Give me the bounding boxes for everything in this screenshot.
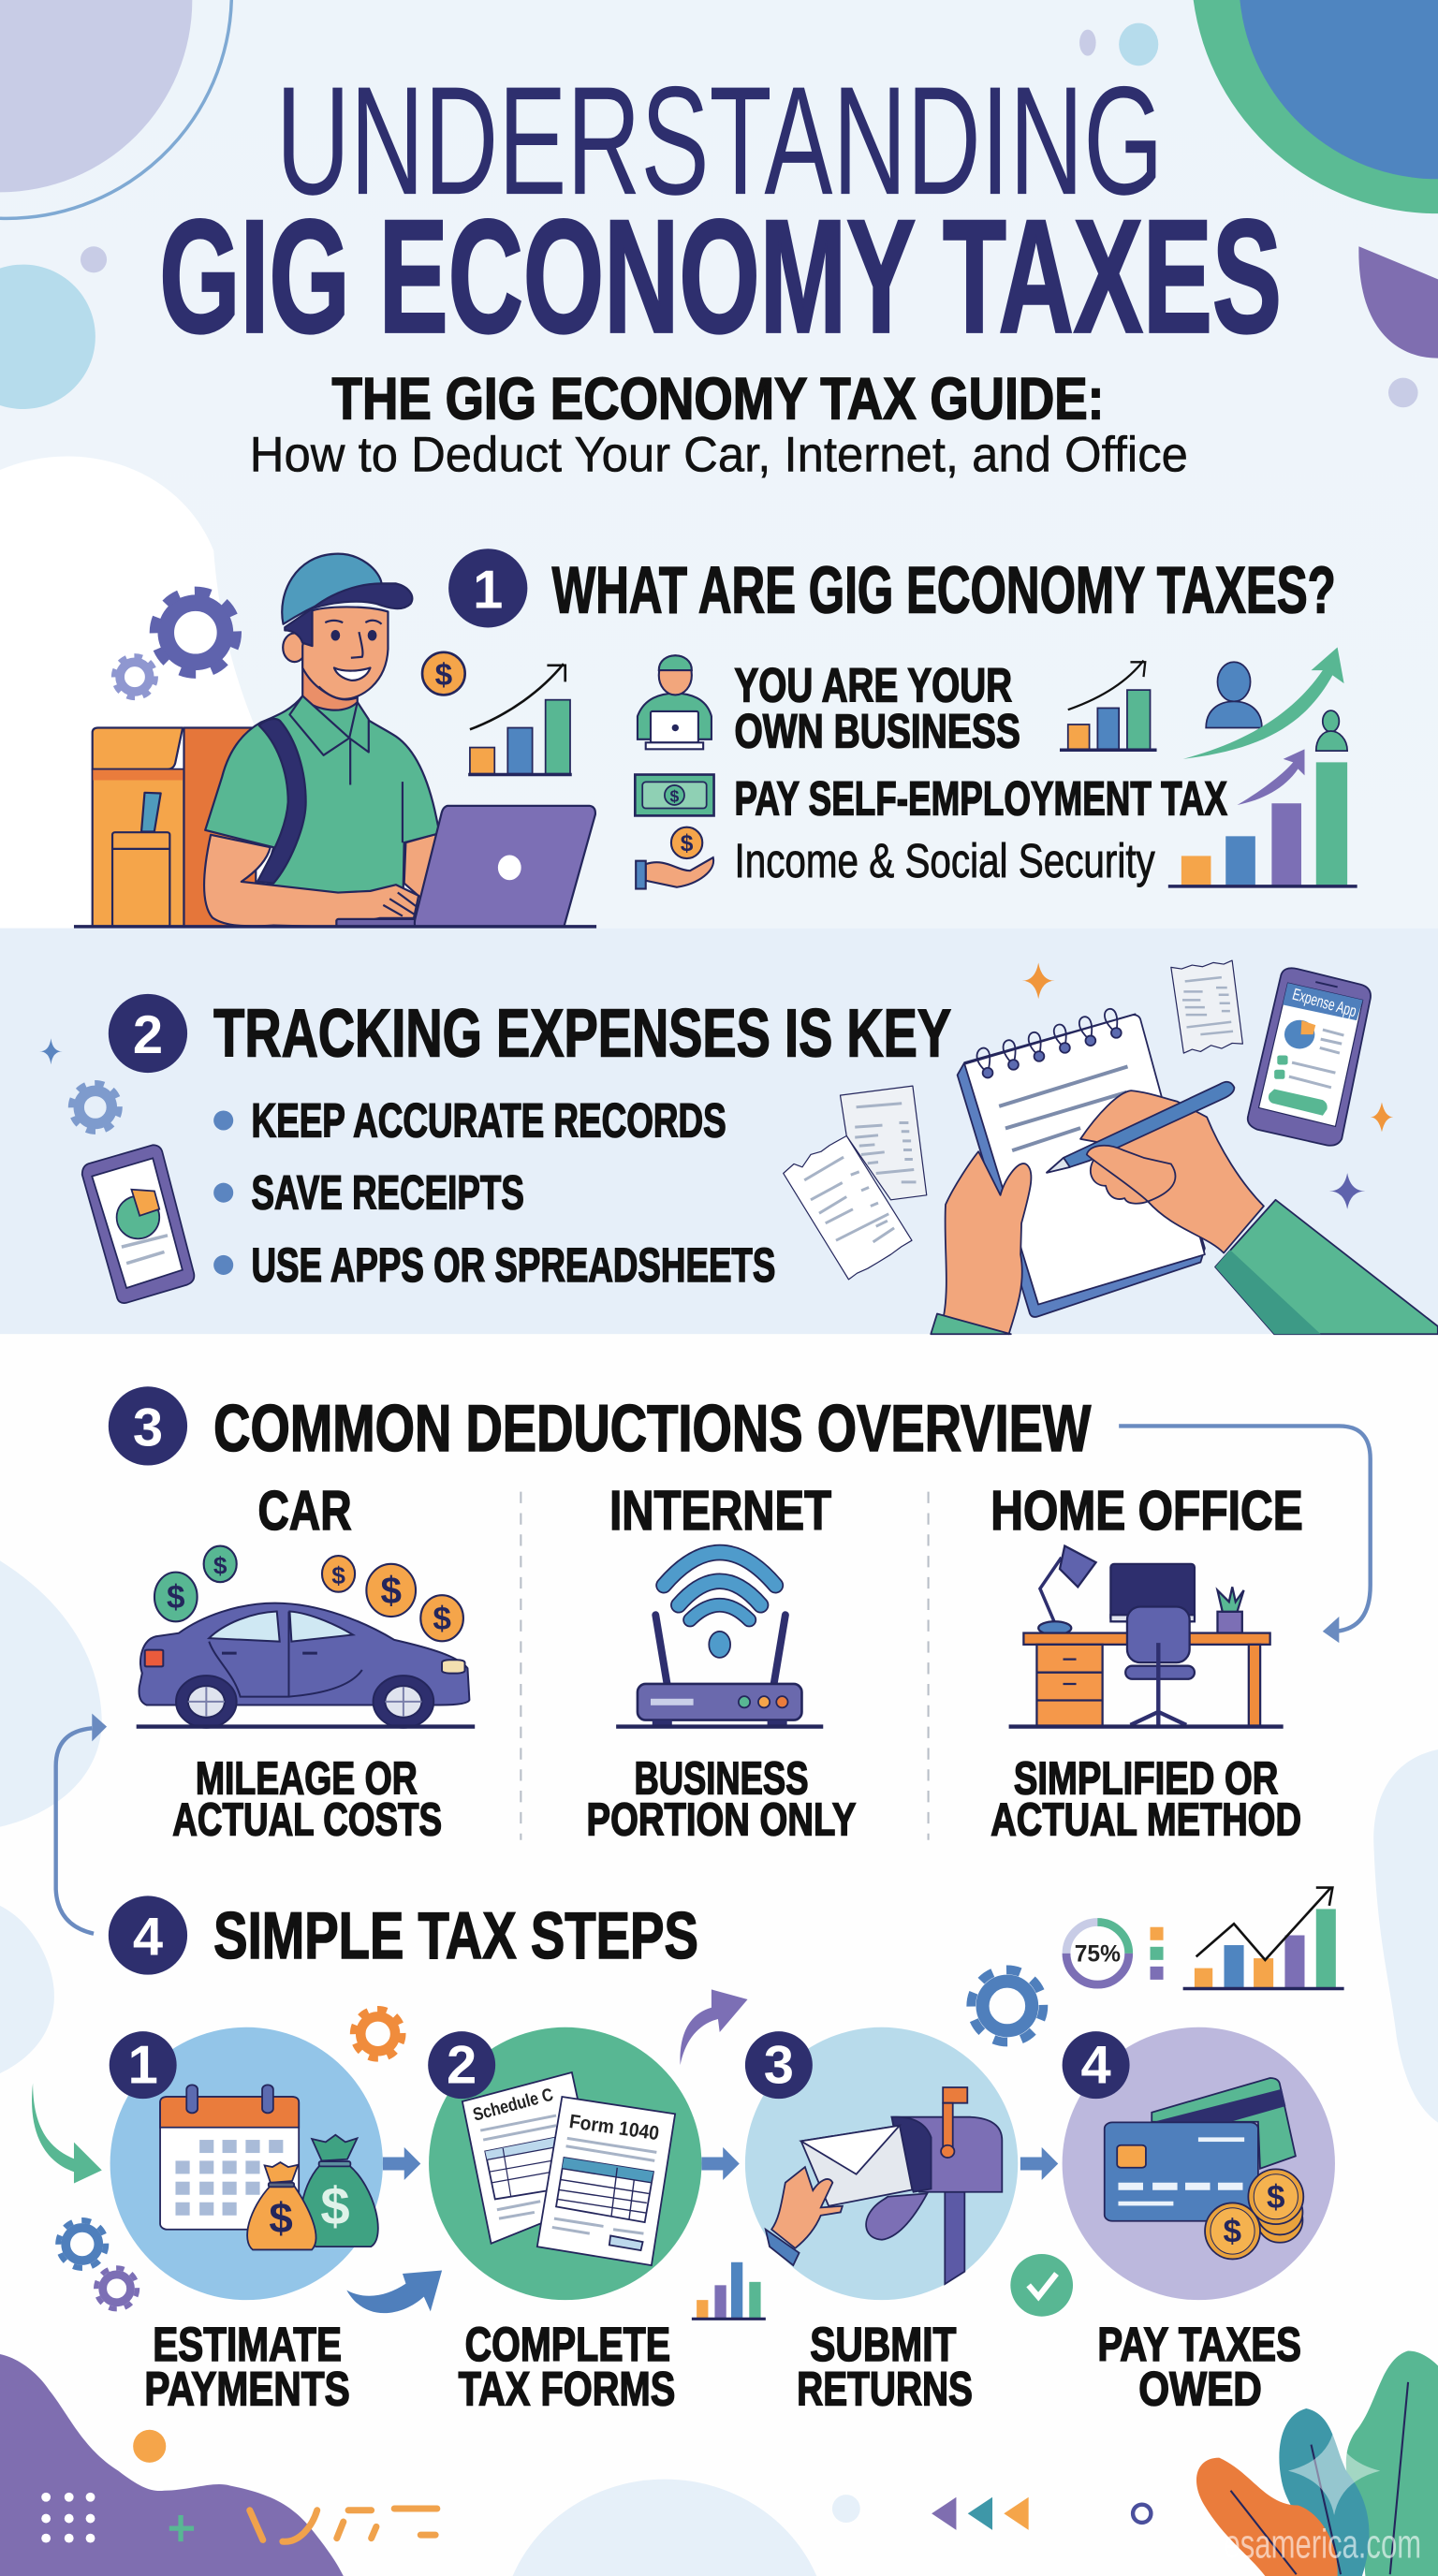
- arrow: step 1 to 2: [383, 2147, 420, 2180]
- icon: car with coins: $: [433, 1601, 451, 1637]
- section heading 3: COMMON DEDUCTIONS OVERVIEW: [213, 1391, 1092, 1465]
- section heading 2: 2: [133, 1005, 163, 1065]
- row text: you are your own business: [734, 658, 1020, 758]
- icon: car with coins: [137, 1546, 475, 1728]
- section heading 2: [109, 994, 951, 1073]
- column: home office: SIMPLIFIED OR: [1014, 1754, 1278, 1805]
- arrow: connector to left: [56, 1714, 107, 1934]
- section 3: common deductions overview: [109, 1386, 1371, 1845]
- step 4: pay taxes owed: OWED: [1138, 2362, 1262, 2415]
- step 4: pay taxes owed: 4: [1080, 2035, 1111, 2095]
- icon: dollar coin: [422, 652, 465, 695]
- section heading 4: SIMPLE TAX STEPS: [213, 1898, 698, 1972]
- bar chart with arrow: [468, 664, 572, 775]
- step 3: submit returns: SUBMIT: [810, 2318, 956, 2371]
- column: internet: [587, 1479, 856, 1845]
- row text: income and social security: Income & Social Security: [734, 834, 1155, 887]
- icon: mailbox, envelope and hand: [766, 2087, 1002, 2284]
- arrow: green growth: [1183, 648, 1344, 759]
- icon: phone with pie chart: [82, 1145, 194, 1303]
- column dividers: [521, 1492, 929, 1840]
- step 1: estimate payments: $: [320, 2176, 350, 2235]
- dot grid: [41, 2493, 95, 2543]
- icon: credit cards and coins: [1105, 2078, 1303, 2259]
- triangle arrows: [932, 2497, 1029, 2530]
- step 1: estimate payments: 1: [128, 2035, 158, 2095]
- icon: car with coins: $: [213, 1551, 227, 1579]
- orange dot: [133, 2430, 166, 2463]
- icon: money bill: [635, 775, 714, 815]
- bullet list: USE APPS OR SPREADSHEETS: [252, 1238, 775, 1292]
- background decoration: lower side blobs: [0, 1560, 1438, 2123]
- orange squiggles: [250, 2509, 437, 2541]
- bullet list: [213, 1094, 775, 1292]
- sparkles: [39, 962, 1393, 1209]
- step 4: pay taxes owed: [1063, 2027, 1335, 2415]
- column: home office: [990, 1479, 1303, 1845]
- section heading 4: [109, 1895, 698, 1975]
- subtitle: THE GIG ECONOMY TAX GUIDE:: [332, 367, 1104, 432]
- icon: money bill: $: [670, 786, 680, 805]
- icon: wifi router: [616, 1553, 823, 1727]
- icon: hand with coin: $: [681, 831, 694, 856]
- icon: desk with chair, monitor and lamp: [1009, 1546, 1284, 1727]
- row text: you are your own business: YOU ARE YOUR: [734, 658, 1012, 711]
- section heading 3: [109, 1386, 1092, 1466]
- icon: car with coins: $: [380, 1569, 402, 1612]
- icon: hand with coin: [636, 827, 713, 889]
- panel background: [0, 929, 1438, 1334]
- arrow: connector to right: [1119, 1426, 1371, 1643]
- footer decoration: [0, 2351, 1438, 2576]
- column: car: CAR: [258, 1479, 352, 1542]
- row text: pay self-employment tax: PAY SELF-EMPLOYMENT TAX: [734, 772, 1227, 826]
- step 3: submit returns: 3: [764, 2035, 794, 2095]
- icon: gear: [71, 1083, 119, 1131]
- section heading 1: 1: [473, 560, 503, 620]
- column: car: ACTUAL COSTS: [172, 1794, 442, 1845]
- icon: orange gear: [353, 2009, 403, 2058]
- row text: you are your own business: OWN BUSINESS: [734, 705, 1020, 758]
- purple blob: [0, 2354, 344, 2576]
- icon: large gear: [154, 592, 237, 674]
- plus mark: [169, 2515, 194, 2541]
- icon: freelancer with laptop: [638, 655, 712, 749]
- arrow: step 2 to 3: [701, 2147, 740, 2180]
- step 3: submit returns: RETURNS: [797, 2362, 973, 2415]
- subtitle: How to Deduct Your Car, Internet, and Office: [250, 428, 1188, 483]
- step 4: pay taxes owed: $: [1224, 2214, 1242, 2250]
- step 4: pay taxes owed: PAY TAXES: [1097, 2318, 1301, 2371]
- section heading 4: 4: [133, 1908, 163, 1968]
- icon: calendar and money bags: [160, 2085, 378, 2249]
- section 4: simple tax steps: [32, 1714, 1344, 2415]
- icon: person: [1206, 662, 1262, 728]
- donut chart 75 percent: 75%: [1075, 1942, 1121, 1968]
- step 2: complete tax forms: Schedule C: [471, 2086, 555, 2126]
- step 1: estimate payments: ESTIMATE: [153, 2318, 342, 2371]
- icon: two small gears: [58, 2220, 138, 2309]
- arrow: step 3 to 4: [1020, 2147, 1058, 2180]
- column: internet: BUSINESS: [634, 1754, 808, 1805]
- column: internet: PORTION ONLY: [587, 1794, 856, 1845]
- ground line: [74, 926, 596, 929]
- column: car: MILEAGE OR: [196, 1754, 418, 1805]
- icon: car with coins: $: [331, 1561, 345, 1589]
- step 1: estimate payments: [110, 2027, 383, 2415]
- arrow: blue curved: [346, 2271, 442, 2313]
- step 1: estimate payments: PAYMENTS: [144, 2362, 350, 2415]
- step 2: complete tax forms: COMPLETE: [465, 2318, 670, 2371]
- section 1: what are gig economy taxes: [74, 549, 1357, 928]
- step 4: pay taxes owed: $: [1267, 2179, 1285, 2216]
- illustration: gig worker with laptop: [93, 554, 595, 928]
- arrow: purple growth: [1238, 749, 1304, 805]
- section heading 2: TRACKING EXPENSES IS KEY: [213, 997, 951, 1072]
- subtitle: [250, 367, 1188, 483]
- icon: small gear: [114, 656, 155, 697]
- bullet list: SAVE RECEIPTS: [252, 1166, 524, 1220]
- bottom semicircle: [513, 2480, 816, 2576]
- step 2: complete tax forms: 2: [447, 2035, 477, 2095]
- ring: [1133, 2505, 1151, 2523]
- step 2: complete tax forms: TAX FORMS: [459, 2362, 675, 2415]
- section 2: tracking expenses: [0, 929, 1438, 1334]
- icon: tax form sheets: [462, 2072, 675, 2265]
- step 2: complete tax forms: Form 1040: [568, 2111, 660, 2144]
- step 3: submit returns: [745, 2027, 1018, 2415]
- arrow: green curved: [32, 2083, 102, 2184]
- title: [159, 54, 1282, 367]
- small bar chart: [1060, 661, 1157, 750]
- sparkle watermark: [1288, 2428, 1380, 2515]
- column: internet: INTERNET: [609, 1479, 831, 1542]
- small bubble: [832, 2495, 860, 2523]
- icon: check badge: [1010, 2254, 1073, 2317]
- background decoration: top shapes: [0, 0, 1438, 929]
- arrow: purple curved: [680, 1989, 748, 2065]
- icon: car with coins: $: [167, 1579, 185, 1616]
- icon: blue gear: [971, 1969, 1043, 2042]
- section heading 3: 3: [133, 1398, 163, 1457]
- icon: small person: [1316, 710, 1347, 751]
- small bar chart: [692, 2262, 766, 2319]
- icon: dollar coin: $: [435, 658, 453, 693]
- phone screen label: Expense App: [1290, 985, 1358, 1020]
- column: home office: HOME OFFICE: [990, 1479, 1303, 1542]
- illustration: notebook, receipts and hands: [784, 960, 1438, 1334]
- step 1: estimate payments: $: [269, 2194, 293, 2242]
- step 2: complete tax forms: [428, 2027, 701, 2415]
- donut chart 75 percent: [1066, 1922, 1164, 1984]
- column: car: [137, 1479, 475, 1845]
- bullet list: KEEP ACCURATE RECORDS: [252, 1094, 726, 1148]
- bar and line chart: [1183, 1888, 1344, 1989]
- column: home office: ACTUAL METHOD: [990, 1794, 1301, 1845]
- plant leaves: [1196, 2351, 1438, 2576]
- large bar chart: [1168, 762, 1357, 886]
